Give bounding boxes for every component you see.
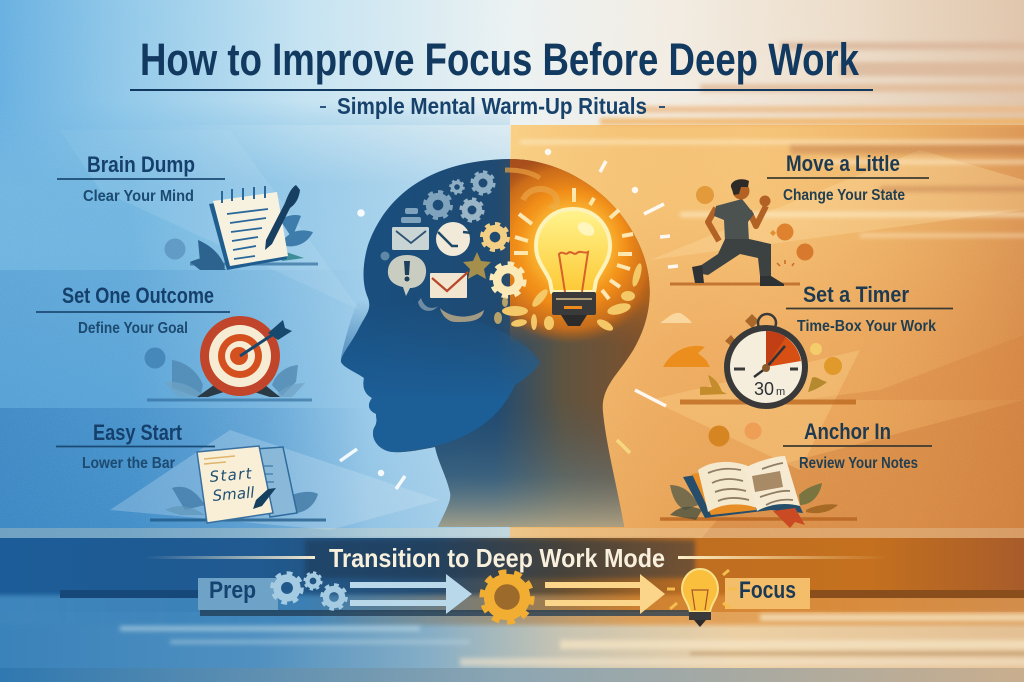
- heading: anchor in: Anchor In: [804, 419, 891, 444]
- icon: open book: [660, 422, 857, 528]
- panel: set a timer: [660, 282, 953, 409]
- icon: notepad and pen: [164, 185, 318, 270]
- icon: stopwatch 30m: [660, 313, 856, 409]
- icon: target with arrow: [144, 316, 312, 400]
- label: prep: Prep: [209, 577, 256, 604]
- icon: stopwatch 30m: 30: [754, 379, 774, 399]
- background: blue and orange split: [0, 0, 1024, 538]
- title: How to Improve Focus Before Deep Work: [140, 34, 860, 85]
- bottom band: transition to deep work mode: [0, 528, 1024, 682]
- subheading: define your goal: Define Your Goal: [78, 320, 188, 337]
- top wash: [0, 0, 511, 170]
- panel: easy start: [56, 420, 326, 523]
- icon: stopwatch 30m: m: [776, 386, 785, 398]
- subheading: clear your mind: Clear Your Mind: [83, 188, 194, 205]
- icon: start small note: Small: [212, 483, 256, 505]
- panel: set one outcome: [36, 283, 312, 400]
- heading: move a little: Move a Little: [786, 151, 900, 176]
- icon: running person: [670, 179, 814, 286]
- arrow: gear to focus: [545, 574, 665, 614]
- light bulb: [528, 200, 618, 326]
- subheading: time-box your work: Time-Box Your Work: [797, 318, 936, 335]
- title underline: [130, 89, 873, 91]
- face highlight and neck shading: [341, 159, 650, 527]
- heading: set one outcome: Set One Outcome: [62, 283, 214, 308]
- icon: focus bulb: [667, 569, 737, 627]
- sparkle dashes around head: [340, 150, 678, 489]
- panel: move a little: [670, 151, 929, 286]
- central head illustration: [341, 159, 650, 527]
- icon: start small note: Start: [209, 464, 253, 486]
- icon: blue gears: [273, 573, 346, 608]
- head silhouette: [341, 159, 650, 527]
- subheading: change your state: Change Your State: [783, 187, 905, 204]
- heading: set a timer: Set a Timer: [803, 282, 909, 307]
- label: transition: Transition to Deep Work Mode: [329, 543, 665, 573]
- subheading: lower the bar: Lower the Bar: [82, 455, 175, 472]
- brain gears and icons: [380, 170, 643, 333]
- band background: [0, 528, 1024, 682]
- heading: brain dump: Brain Dump: [87, 152, 195, 177]
- label: focus: Focus: [739, 577, 796, 604]
- heading: easy start: Easy Start: [93, 420, 183, 445]
- subtitle: Simple Mental Warm-Up Rituals: [337, 93, 647, 119]
- panel: brain dump: [57, 152, 318, 270]
- icon: start small note: [150, 446, 326, 523]
- subheading: review your notes: Review Your Notes: [799, 455, 918, 472]
- panel: anchor in: [660, 419, 932, 528]
- arrow: prep to gear: [350, 574, 472, 614]
- icon: orange gear: [484, 574, 530, 620]
